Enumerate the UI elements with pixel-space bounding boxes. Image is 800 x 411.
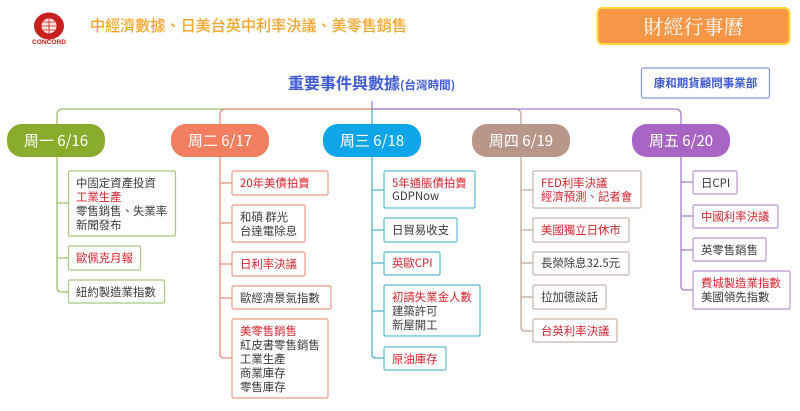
item: 美國獨立日休市 [533,218,629,242]
item: 美零售銷售: 紅皮書零售銷售 [240,337,320,353]
item: 和碩 群光 台達電除息 [232,205,305,242]
item: 5年通膨債拍賣 GDPNow: GDPNow [392,188,439,204]
item: FED利率決議: 經濟預測、記者會 [541,188,633,204]
item: 英零售銷售 [693,238,766,261]
item: 中國資料: 新聞發布 [76,217,122,233]
pill: 周四 6/19: 周四 6/19 [489,130,553,151]
item: 日貿易收支: 日貿易收支 [392,222,449,238]
item: 費城製造業指數 美國領先指數: 美國領先指數 [701,289,770,305]
item: 5年通膨債拍賣 GDPNow: 5年通脹債拍賣 [392,175,467,191]
item: 中國資料: 零售銷售、失業率 [76,203,167,219]
item: 歐經濟景氣指數: 歐經濟景氣指數 [240,290,320,306]
item: 英歐CPI [384,252,440,275]
item: 費城製造業指數 美國領先指數: 費城製造業指數 [701,275,781,291]
item: 長榮除息32.5元 [533,252,629,275]
item: 紐約製造業指數 [68,280,164,303]
pill: 周一 6/16: 周一 6/16 [24,130,88,151]
department box: 康和期貨顧問事業部 [654,75,758,91]
item: 日利率決議 [232,252,305,276]
item: 初請失業金人數 [384,285,480,336]
item: 歐佩克月報 [68,246,140,270]
item: 拉加德談話 [533,285,606,309]
pill: 周二 6/17: 周二 6/17 [188,130,252,151]
connectors: Wednesday [372,109,384,358]
item: 中國資料: 工業生產 [76,189,122,205]
item: 初請失業金人數: 初請失業金人數 [392,289,472,305]
pill: 周四 6/19 [472,124,570,157]
headline: 中經濟數據、日美台英中利率決議、美零售銷售 [90,14,407,36]
banner: 財經行事曆 [598,8,790,44]
item: 英零售銷售: 英零售銷售 [701,242,758,258]
item: 美零售銷售: 零售庫存 [240,379,286,395]
panel: Monday 6/16 [7,109,372,303]
item: 原油庫存: 原油庫存 [392,351,438,367]
panel: Tuesday 6/17 [171,109,372,398]
root connector [371,101,373,109]
item: 長榮除息32.5元: 長榮除息32.5元 [541,255,620,271]
item: 初請失業金人數: 建築許可 [392,303,438,319]
logo: Concord: CONCORD [32,39,66,46]
connectors: Monday [57,109,372,292]
item: 拉加德談話: 拉加德談話 [541,289,598,305]
item: 20年美債拍賣: 20年美債拍賣 [240,175,310,191]
item: 中國利率決議: 中國利率決議 [701,208,770,224]
pill: 周二 6/17 [171,124,269,157]
pill: 周三 6/18: 周三 6/18 [340,130,404,151]
item: 日CPI: 日CPI [701,175,730,191]
item: 20年美債拍賣 [232,171,328,195]
connectors: Thursday [372,109,533,331]
item: 初請失業金人數: 新屋開工 [392,317,438,333]
connectors: Friday [372,109,693,290]
item: 和碩 群光 台達電除息: 台達電除息 [240,223,297,239]
item: 5年通膨債拍賣 GDPNow [384,171,475,208]
item: 歐經濟景氣指數 [232,286,331,309]
item: 日利率決議: 日利率決議 [240,256,298,272]
pill: 周三 6/18 [323,124,421,157]
item: FED利率決議 [533,171,641,208]
item: 原油庫存 [384,347,446,370]
banner: 財經行事曆: 財經行事曆 [644,11,744,40]
panel: Friday 6/20 [372,109,790,309]
pill: 周五 6/20 [632,124,730,157]
item: 日貿易收支 [384,218,457,242]
item: 美國獨立日休市: 美國獨立日休市 [541,222,621,238]
item: 費城製造業指數 美國領先指數 [693,271,790,309]
pill: 周一 6/16 [7,124,105,157]
pill: 周五 6/20: 周五 6/20 [649,130,713,151]
item: 英歐CPI: 英歐CPI [392,255,433,271]
department box [642,68,770,98]
logo: Concord [32,12,66,46]
item: 紐約製造業指數: 紐約製造業指數 [76,284,156,300]
item: 中國資料: 中固定資產投資 [76,175,156,191]
item: 台英利率決議: 台英利率決議 [541,323,610,339]
item: 日CPI [693,171,737,194]
item: 和碩 群光 台達電除息: 和碩 群光 [240,209,288,225]
item: 美零售銷售: 工業生產 [240,351,286,367]
item: FED利率決議: FED利率決議 [541,175,608,191]
item: 美零售銷售: 美零售銷售 [240,323,297,339]
main title: (台灣時間) [400,77,455,93]
panel: Thursday 6/19 [372,109,641,342]
item: 台英利率決議 [533,319,617,342]
connectors: Tuesday [220,109,372,358]
item: 美零售銷售: 商業庫存 [240,365,286,381]
item: 中國利率決議 [693,205,778,228]
item: 中國資料 [68,171,176,236]
item: 美零售銷售 [232,319,328,398]
main title: 重要事件與數據 [288,70,400,94]
item: 歐佩克月報: 歐佩克月報 [76,250,134,266]
panel: Wednesday 6/18 [323,109,480,370]
